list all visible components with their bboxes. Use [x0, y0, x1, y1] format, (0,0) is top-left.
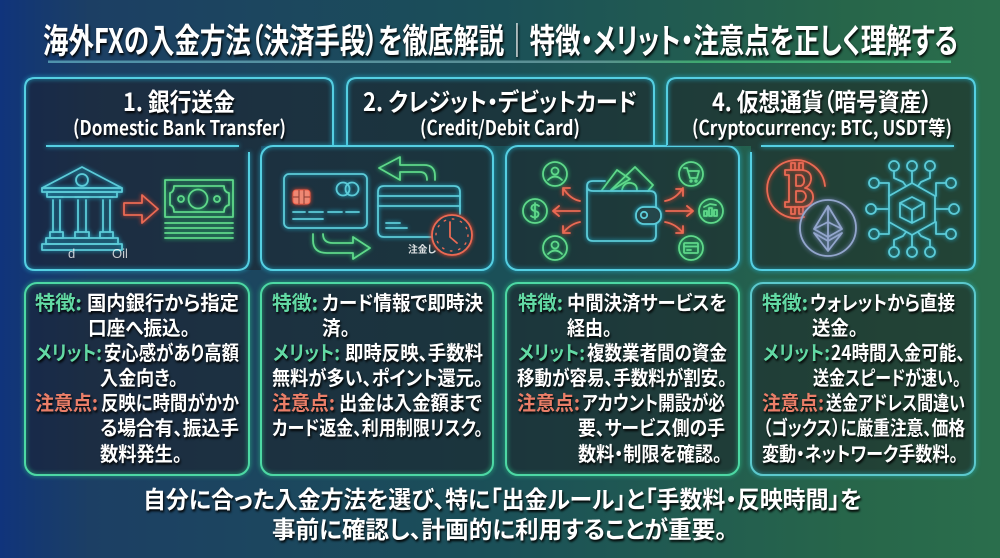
heading: credit card: (Credit/Debit Card) [420, 112, 580, 141]
text panel: crypto details: 特徴: [762, 287, 808, 316]
icon: chart [699, 199, 723, 223]
text panel: card details: カード情報で即時決 [322, 287, 483, 316]
text panel: bank transfer details: 反映に時間がかか [101, 387, 239, 416]
heading: crypto [692, 83, 952, 141]
text panel: crypto details: 24時間入金可能、 [831, 337, 965, 366]
icon label remnants: d [68, 246, 75, 261]
text panel: bank transfer details: 特徴: [35, 287, 82, 316]
text panel: intermediary details: メリット: [518, 337, 585, 366]
text panel: intermediary details: 移動が容易、手数料が割安。 [517, 362, 727, 391]
icon: banknotes [165, 180, 233, 238]
text panel: intermediary details [506, 283, 739, 475]
header rule [46, 145, 239, 147]
text panel: intermediary details: 注意点: [517, 387, 580, 416]
text panel: crypto details: メリット: [763, 337, 830, 366]
heading: crypto: (Cryptocurrency: BTC, USDT等) [692, 112, 952, 141]
text panel: crypto details [751, 283, 975, 475]
text panel: crypto details: 送金スピードが速い。 [813, 362, 961, 391]
text panel: card details [261, 283, 493, 475]
icon: person bottom [543, 236, 567, 260]
text panel: intermediary details: 複数業者間の資金 [587, 337, 727, 366]
text panel: crypto details: 注意点: [762, 387, 824, 416]
small caption: 注金し [408, 241, 437, 256]
heading: bank transfer: (Domestic Bank Transfer) [73, 112, 286, 141]
text panel: intermediary details: 中間決済サービスを [567, 287, 727, 316]
text panel: intermediary details: 経由。 [567, 312, 612, 341]
text panel: bank transfer details: る場合有、振込手 [100, 412, 239, 441]
icon: bitcoin [767, 160, 825, 218]
icon: card chip [293, 190, 310, 204]
text panel: bank transfer details: 入金向き。 [100, 362, 178, 391]
text panel: crypto details: 変動・ネットワーク手数料。 [762, 438, 958, 467]
text panel: card details: 特徴: [272, 287, 318, 316]
text panel: intermediary details: アカウント開設が必 [582, 387, 725, 416]
icon: cart [679, 162, 703, 186]
text panel: intermediary details: 特徴: [518, 287, 563, 316]
panel: 3 wallet illustration [506, 146, 739, 270]
heading: credit card [363, 83, 637, 141]
text panel: bank transfer details: 注意点: [35, 387, 98, 416]
text panel: card details: 即時反映、手数料 [345, 337, 483, 366]
heading: credit card: 2. クレジット・デビットカード [363, 83, 637, 119]
footer summary [143, 480, 862, 545]
text panel: crypto details: ウォレットから直接 [810, 287, 955, 316]
icon: ethereum [800, 200, 856, 256]
text panel: card details: カード返金、利用制限リスク。 [272, 412, 483, 441]
text panel: crypto details: （ゴックス）に厳重注意、価格 [763, 412, 965, 441]
panel: 4 crypto [667, 78, 975, 270]
text panel: card details: 無料が多い、ポイント還元。 [272, 362, 483, 391]
icon: blockchain network [866, 161, 959, 257]
panel: 2 card illustration [261, 146, 493, 270]
icon label remnants [68, 246, 128, 261]
icon: card [679, 236, 703, 260]
text panel: card details: メリット: [273, 337, 340, 366]
icon: back credit card [378, 186, 460, 237]
text panel: bank transfer details: 口座へ振込。 [88, 312, 190, 341]
panel: 2 credit/debit card header [347, 78, 654, 146]
text panel: card details: 出金は入金額まで [339, 387, 482, 416]
footer summary: 自分に合った入金方法を選び、特に「出金ルール」と「手数料・反映時間」を [143, 480, 862, 515]
text panel: bank transfer details: 数料発生。 [100, 438, 182, 467]
text panel: bank transfer details: メリット: [36, 337, 102, 366]
icon: bank building [42, 167, 122, 250]
text panel: bank transfer details [25, 283, 249, 475]
icon: person top [543, 162, 567, 186]
icon: transfer arrow [124, 195, 158, 223]
text panel: bank transfer details: 国内銀行から指定 [87, 287, 239, 316]
icon: top return arrow [379, 157, 435, 180]
icon label remnants: Oil [112, 246, 128, 261]
title underline [48, 60, 951, 63]
heading: bank transfer [73, 83, 286, 141]
icon: wallet [587, 181, 661, 241]
icon: bottom transfer arrow [313, 234, 370, 259]
panel: 1 bank transfer [25, 78, 333, 270]
text panel: intermediary details: 数料・制限を確認。 [578, 438, 722, 467]
heading: bank transfer: 1. 銀行送金 [123, 83, 235, 119]
text panel: intermediary details: 要、サービス側の手 [578, 412, 725, 441]
text panel: card details: 済。 [322, 312, 350, 341]
text panel: crypto details: 送金。 [812, 312, 858, 341]
icon: dollar [523, 199, 547, 223]
icon: banknotes in wallet [602, 167, 653, 191]
icon: front credit card [284, 174, 367, 228]
icon: clock [432, 215, 472, 255]
text panel: crypto details: 送金アドレス間違い [826, 387, 965, 416]
text panel: card details: 注意点: [272, 387, 335, 416]
footer summary: 事前に確認し、計画的に利用することが重要。 [272, 510, 727, 545]
header rule [761, 145, 954, 147]
text panel: bank transfer details: 安心感があり高額 [104, 337, 239, 366]
heading: crypto: 4. 仮想通貨（暗号資産） [712, 83, 932, 119]
icon: outflow arrows right [665, 188, 693, 233]
icon: outflow arrows left [553, 188, 580, 233]
